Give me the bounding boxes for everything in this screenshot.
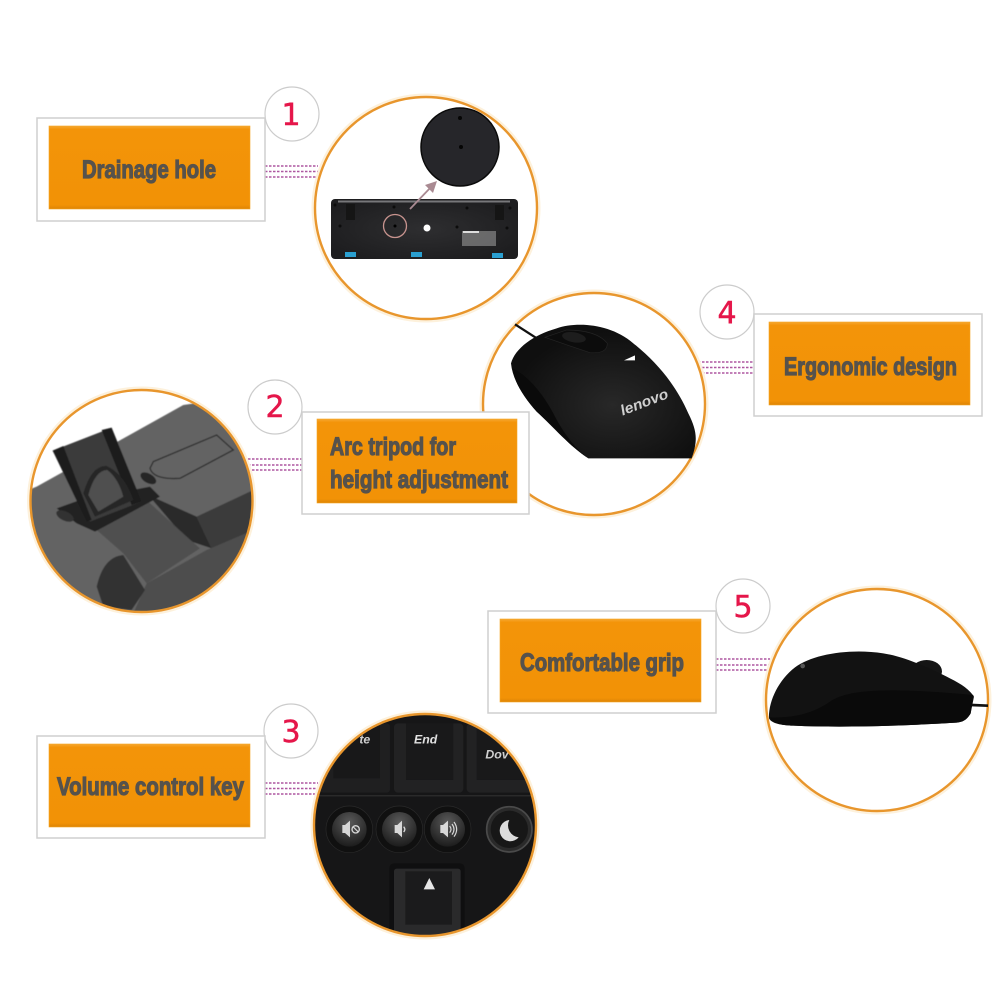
label box: Ergonomic design: Ergonomic design	[784, 353, 957, 381]
panel: 4 ergonomic design	[482, 285, 982, 516]
photo circle: mouse top view	[482, 292, 706, 516]
panel: 1 drainage hole	[37, 87, 538, 320]
number badge 4: 4	[717, 296, 737, 331]
photo circle: keyboard underside	[314, 96, 538, 320]
label box: Volume control key: Volume control key	[57, 773, 244, 801]
number badge 2: 2	[265, 390, 285, 425]
number badge 3	[264, 704, 318, 758]
panel: 3 volume control key	[37, 704, 550, 950]
label box: Comfortable grip	[488, 611, 716, 713]
photo circle: mouse top view: lenovo	[618, 387, 671, 419]
photo circle: keyboard volume keys: Dov	[485, 748, 510, 762]
number badge 1: 1	[281, 98, 301, 133]
number badge 5	[716, 579, 770, 633]
photo circle: tripod foot	[27, 386, 256, 616]
label box: Comfortable grip: Comfortable grip	[520, 649, 684, 677]
panel: 2 arc tripod	[20, 380, 302, 633]
label box: Drainage hole	[37, 118, 265, 221]
number badge 2	[248, 380, 302, 434]
photo circle: mouse side view	[765, 588, 989, 812]
number badge 4	[700, 285, 754, 339]
label box: Drainage hole: Drainage hole	[82, 156, 216, 184]
label box: Arc tripod for height adjustment: height adjustment	[330, 466, 509, 494]
label box: Volume control key	[37, 736, 265, 838]
photo circle: keyboard volume keys	[310, 710, 540, 940]
number badge 1	[265, 87, 319, 141]
label box: Ergonomic design	[754, 314, 982, 416]
number badge 3: 3	[281, 715, 301, 750]
arrow: zoom to hole	[410, 181, 437, 209]
number badge 5: 5	[733, 590, 753, 625]
label box: Arc tripod for height adjustment	[302, 412, 529, 514]
panel: 5 comfortable grip	[488, 579, 989, 812]
photo circle: keyboard volume keys: End	[414, 732, 438, 746]
photo circle: keyboard volume keys: te	[359, 732, 370, 746]
label box: Arc tripod for height adjustment: Arc tripod for	[330, 433, 456, 461]
